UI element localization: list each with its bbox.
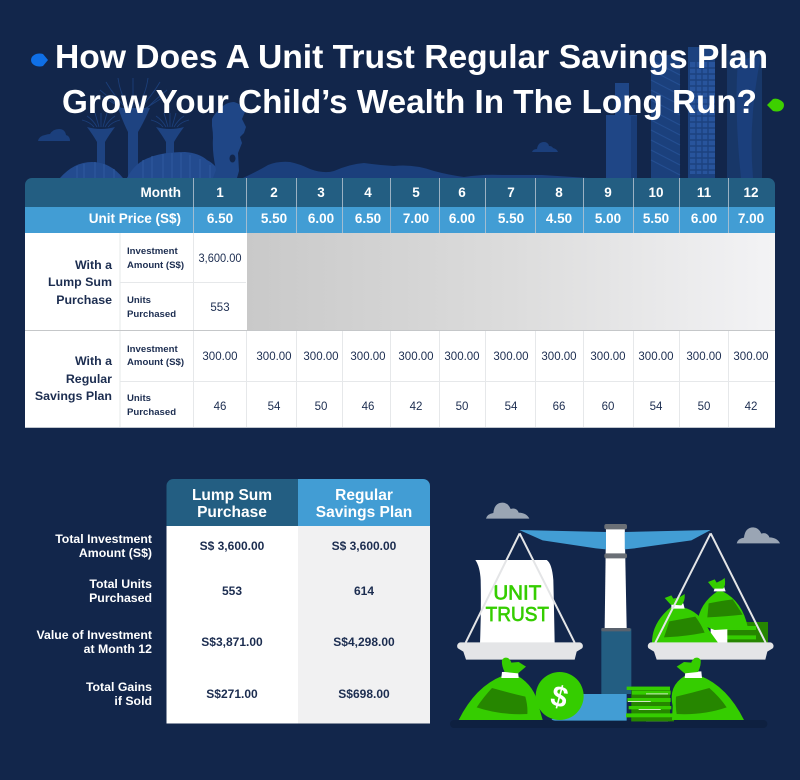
lump sum figures: S$271.00 bbox=[206, 687, 258, 701]
coin: $ bbox=[547, 679, 572, 715]
cloud left bbox=[38, 129, 70, 141]
base bbox=[552, 694, 627, 721]
month row text: 3 bbox=[317, 185, 325, 200]
right pan bbox=[648, 642, 774, 660]
month row text: 8 bbox=[555, 185, 563, 200]
regular figures: S$ 3,600.00 bbox=[332, 539, 397, 553]
row sublabels: Investment bbox=[127, 246, 178, 257]
month row text: 1 bbox=[216, 185, 224, 200]
lump sum values: 3,600.00 bbox=[198, 253, 242, 265]
row sublabels: Units bbox=[127, 393, 151, 404]
regular units values: 50 bbox=[315, 401, 327, 413]
month row text: 9 bbox=[604, 185, 612, 200]
lump sum values bbox=[198, 253, 242, 314]
unit price text: Unit Price (S$) bbox=[89, 211, 181, 226]
month row text: 11 bbox=[697, 185, 712, 200]
lump sum figures: 553 bbox=[222, 584, 242, 598]
regular savings header: Regular bbox=[335, 487, 393, 504]
money bag left bbox=[459, 658, 543, 720]
row labels: Purchased bbox=[89, 591, 152, 605]
month row text: 10 bbox=[648, 185, 664, 200]
regular savings label: Regular bbox=[66, 372, 112, 386]
beam bbox=[519, 530, 711, 549]
cloud right bbox=[737, 527, 780, 543]
regular figures: S$698.00 bbox=[338, 687, 390, 701]
regular savings label: Savings Plan bbox=[35, 389, 112, 403]
paper: unit trust: UNIT bbox=[493, 582, 541, 604]
row labels: Total Gains bbox=[86, 680, 152, 694]
unit price text: 6.50 bbox=[207, 211, 233, 226]
lump sum label: Purchase bbox=[56, 293, 112, 307]
regular units values: 60 bbox=[602, 401, 614, 413]
regular units values: 50 bbox=[456, 401, 468, 413]
regular units values bbox=[214, 401, 757, 413]
unit price text: 7.00 bbox=[738, 211, 764, 226]
unit price row bbox=[25, 207, 775, 233]
month row text: 2 bbox=[270, 185, 278, 200]
paper: unit trust: TRUST bbox=[486, 604, 549, 626]
unit price text: 5.50 bbox=[261, 211, 287, 226]
regular investment values: 300.00 bbox=[541, 351, 577, 363]
regular units values: 46 bbox=[214, 401, 226, 413]
lump sum label: Lump Sum bbox=[48, 275, 112, 289]
month row text: 12 bbox=[743, 185, 759, 200]
regular figures: 614 bbox=[354, 584, 374, 598]
skyline backdrop bbox=[38, 47, 762, 183]
lump sum values: 553 bbox=[210, 302, 230, 314]
unit price text: 6.50 bbox=[355, 211, 381, 226]
row sublabels: Purchased bbox=[127, 407, 176, 418]
regular investment values: 300.00 bbox=[590, 351, 626, 363]
lump sum figures bbox=[200, 539, 265, 701]
unit price text: 6.00 bbox=[308, 211, 334, 226]
illustration: balance scale bbox=[450, 503, 780, 728]
money bag right bbox=[672, 658, 744, 720]
row labels bbox=[36, 532, 152, 708]
row labels: Amount (S$) bbox=[79, 546, 152, 560]
row labels: Value of Investment bbox=[36, 628, 152, 642]
regular investment values: 300.00 bbox=[202, 351, 238, 363]
regular savings header: Savings Plan bbox=[316, 504, 412, 521]
month row text: Month bbox=[141, 185, 181, 200]
unit price text: 5.00 bbox=[595, 211, 621, 226]
domes bbox=[60, 152, 223, 178]
lump sum header bbox=[166, 479, 298, 526]
regular units values: 54 bbox=[268, 401, 281, 413]
regular savings label: With a bbox=[75, 354, 112, 368]
icon: green leaf bbox=[767, 99, 784, 112]
coin bbox=[536, 672, 584, 720]
unit price text: 6.00 bbox=[691, 211, 717, 226]
regular units values: 42 bbox=[745, 401, 757, 413]
summary table bbox=[36, 479, 430, 724]
month row text: 6 bbox=[458, 185, 466, 200]
merlion bbox=[212, 102, 246, 183]
regular investment values bbox=[202, 351, 769, 363]
supertrees bbox=[82, 78, 189, 178]
regular figures: S$4,298.00 bbox=[333, 635, 395, 649]
row labels: at Month 12 bbox=[84, 642, 152, 656]
regular units values: 54 bbox=[505, 401, 518, 413]
row sublabels bbox=[127, 246, 184, 418]
month row text bbox=[141, 185, 759, 200]
unit price text: 5.50 bbox=[643, 211, 669, 226]
regular investment values: 300.00 bbox=[398, 351, 434, 363]
row sublabels: Investment bbox=[127, 344, 178, 355]
regular investment values: 300.00 bbox=[444, 351, 480, 363]
title bbox=[55, 38, 768, 120]
column lower bbox=[601, 629, 631, 694]
regular units values: 46 bbox=[362, 401, 374, 413]
paper: unit trust bbox=[475, 560, 555, 643]
lump sum column bbox=[166, 526, 298, 724]
month header bbox=[25, 178, 775, 207]
lump sum header: Purchase bbox=[197, 504, 267, 521]
monthly table bbox=[25, 178, 775, 428]
row labels: if Sold bbox=[114, 694, 152, 708]
right pan bags bbox=[652, 578, 768, 643]
left pan bbox=[457, 642, 583, 660]
row labels: Total Investment bbox=[55, 532, 152, 546]
lump sum figures: S$3,871.00 bbox=[201, 635, 263, 649]
regular units values: 42 bbox=[410, 401, 422, 413]
cloud left bbox=[486, 503, 529, 519]
unit price text: 6.00 bbox=[449, 211, 475, 226]
regular investment values: 300.00 bbox=[686, 351, 722, 363]
row sublabels: Units bbox=[127, 295, 151, 306]
regular column bbox=[298, 526, 430, 724]
month row text: 4 bbox=[364, 185, 372, 200]
unit price text bbox=[89, 211, 764, 226]
unit price text: 4.50 bbox=[546, 211, 572, 226]
cloud middle bbox=[532, 142, 558, 152]
row sublabels: Purchased bbox=[127, 309, 176, 320]
column upper bbox=[605, 527, 627, 628]
lump sum header: Lump Sum bbox=[192, 487, 272, 504]
unit price text: 7.00 bbox=[403, 211, 429, 226]
regular units values: 66 bbox=[553, 401, 565, 413]
title: Grow Your Child’s Wealth In The Long Run? bbox=[62, 83, 757, 120]
strings bbox=[466, 533, 766, 643]
regular investment values: 300.00 bbox=[303, 351, 339, 363]
lump sum label: With a bbox=[75, 258, 112, 272]
regular investment values: 300.00 bbox=[256, 351, 292, 363]
cash stack bbox=[626, 687, 674, 721]
ground bbox=[450, 720, 767, 728]
regular investment values: 300.00 bbox=[638, 351, 674, 363]
month row text: 5 bbox=[412, 185, 420, 200]
month row text: 7 bbox=[507, 185, 515, 200]
regular savings label bbox=[35, 354, 112, 403]
regular investment values: 300.00 bbox=[733, 351, 769, 363]
title: How Does A Unit Trust Regular Savings Plan bbox=[55, 38, 768, 75]
lump sum figures: S$ 3,600.00 bbox=[200, 539, 265, 553]
hills bbox=[243, 162, 604, 180]
row sublabels: Amount (S$) bbox=[127, 357, 184, 368]
regular units values: 54 bbox=[650, 401, 663, 413]
row sublabels: Amount (S$) bbox=[127, 260, 184, 271]
row labels: Total Units bbox=[89, 577, 152, 591]
regular investment values: 300.00 bbox=[493, 351, 529, 363]
regular figures bbox=[332, 539, 397, 701]
buildings bbox=[606, 47, 762, 178]
table body bbox=[25, 233, 775, 428]
lump sum label bbox=[48, 258, 112, 307]
regular investment values: 300.00 bbox=[350, 351, 386, 363]
regular savings header bbox=[298, 479, 430, 526]
regular units values: 50 bbox=[698, 401, 710, 413]
unit price text: 5.50 bbox=[498, 211, 524, 226]
icon: blue leaf bbox=[31, 54, 48, 66]
